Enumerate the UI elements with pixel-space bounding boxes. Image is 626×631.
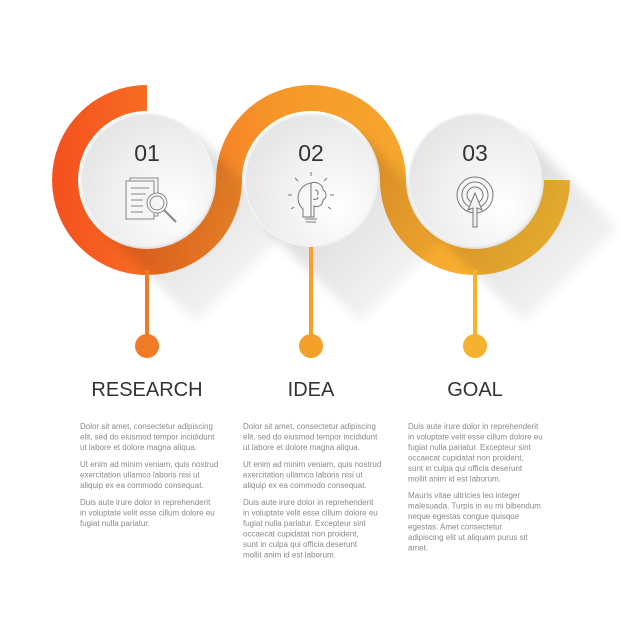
text column 3: amet. bbox=[408, 544, 428, 552]
icon: target bbox=[457, 177, 493, 227]
text column 2 bbox=[243, 422, 381, 560]
text column 3: malesuada. Turpis in eu mi bibendum bbox=[408, 502, 541, 510]
text column 2: in voluptate velit esse cillum dolore eu bbox=[243, 508, 378, 518]
text column 3: fugiat nulla pariatur. Excepteur sint bbox=[408, 443, 532, 452]
icon: bulb brain bbox=[288, 172, 334, 222]
circle 1 bbox=[81, 114, 213, 246]
ribbon bbox=[65, 98, 557, 262]
text column 2: fugiat nulla pariatur. Excepteur sint bbox=[243, 519, 367, 528]
stems bbox=[135, 245, 487, 358]
circle 2 bbox=[245, 114, 377, 246]
text column 2: ut labore et dolore magna aliqua. bbox=[243, 443, 360, 452]
shadows bbox=[100, 132, 618, 322]
text column 3: mollit anim id est laborum. bbox=[408, 474, 501, 484]
text column 2: aliquip ex ea commodo consequat. bbox=[243, 481, 367, 490]
headings: RESEARCH bbox=[91, 379, 203, 401]
text column 3: egestas. Amet consectetur bbox=[408, 522, 503, 532]
text column 1: aliquip ex ea commodo consequat. bbox=[80, 481, 204, 490]
number 02: 02 bbox=[298, 140, 324, 166]
text column 3 bbox=[408, 422, 543, 552]
text column 3: occaecat cupidatat non proident, bbox=[408, 454, 524, 462]
text column 1: in voluptate velit esse cillum dolore eu bbox=[80, 508, 215, 518]
text column 2: elit, sed do eiusmod tempor incididunt bbox=[243, 432, 378, 442]
headings: GOAL bbox=[447, 379, 503, 401]
headings: IDEA bbox=[288, 379, 335, 401]
text column 1: Ut enim ad minim veniam, quis nostrud bbox=[80, 460, 218, 469]
text column 3: Duis aute irure dolor in reprehenderit bbox=[408, 422, 539, 431]
text column 3: in voluptate velit esse cillum dolore eu bbox=[408, 432, 543, 442]
text column 1: ut labore et dolore magna aliqua. bbox=[80, 443, 197, 452]
text column 2: Dolor sit amet, consectetur adipiscing bbox=[243, 422, 376, 431]
text column 1 bbox=[80, 422, 218, 528]
text column 1: Dolor sit amet, consectetur adipiscing bbox=[80, 422, 213, 431]
text column 2: Duis aute irure dolor in reprehenderit bbox=[243, 498, 374, 507]
text column 2: exercitation ullamco laboris nisi ut bbox=[243, 470, 363, 480]
text column 3: adipiscing elit ut aliquam purus sit bbox=[408, 533, 528, 542]
headings bbox=[91, 379, 503, 401]
number 01: 01 bbox=[134, 140, 160, 166]
text column 2: Ut enim ad minim veniam, quis nostrud bbox=[243, 460, 381, 469]
icon: document search bbox=[126, 178, 176, 222]
text column 1: exercitation ullamco laboris nisi ut bbox=[80, 470, 200, 480]
text column 1: Duis aute irure dolor in reprehenderit bbox=[80, 498, 211, 507]
text column 2: occaecat cupidatat non proident, bbox=[243, 530, 359, 538]
text column 3: neque egestas congue quisque bbox=[408, 512, 520, 521]
text column 3: Mauris vitae ultricies leo integer bbox=[408, 491, 520, 500]
text column 2: mollit anim id est laborum. bbox=[243, 550, 336, 560]
text column 3: sunt in culpa qui officia deserunt bbox=[408, 464, 523, 473]
number 03: 03 bbox=[462, 140, 488, 166]
circle 3 bbox=[409, 114, 541, 246]
text column 1: elit, sed do eiusmod tempor incididunt bbox=[80, 432, 215, 442]
text column 2: sunt in culpa qui officia deserunt bbox=[243, 540, 358, 549]
text column 1: fugiat nulla pariatur. bbox=[80, 519, 150, 528]
